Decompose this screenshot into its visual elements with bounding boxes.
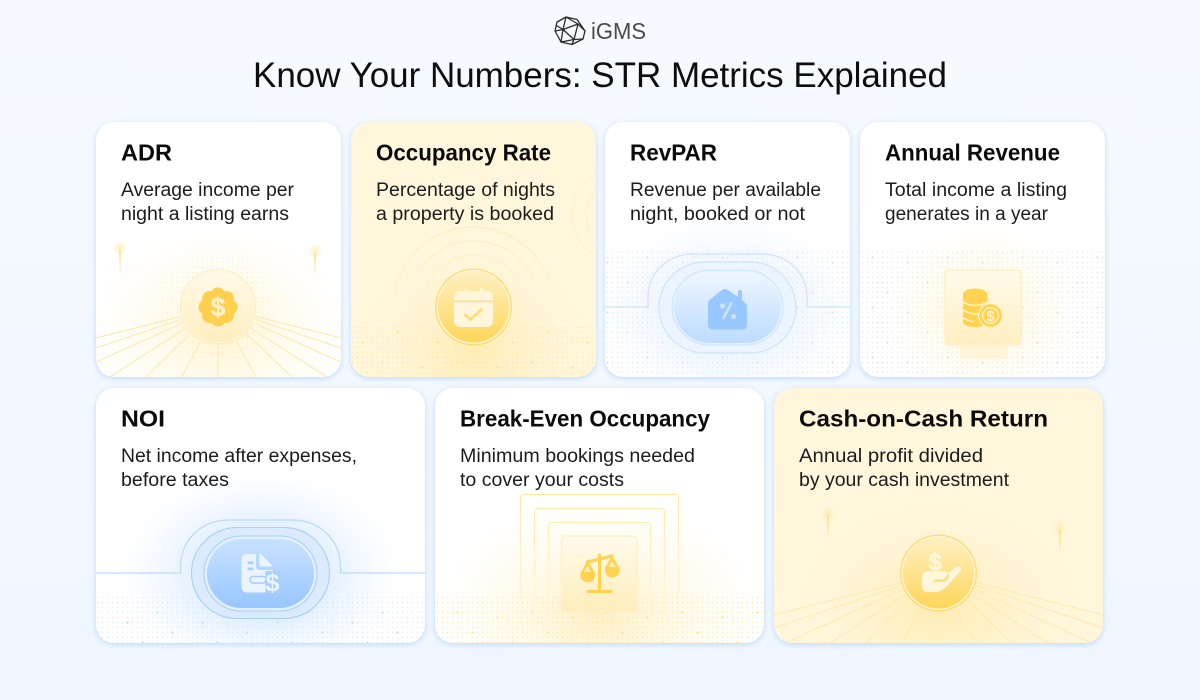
description: by your cash investment: [799, 470, 1010, 491]
glow: [846, 545, 1030, 643]
glow: [910, 247, 1056, 377]
dots: [96, 593, 425, 643]
heading: ADR: [121, 140, 172, 166]
icon: balance scale: [580, 555, 620, 592]
arch line: [96, 520, 425, 573]
icon: hand with dollar: $: [928, 549, 942, 576]
description: to cover your costs: [460, 470, 624, 491]
icon: document with dollar: $: [266, 569, 280, 597]
glow: [471, 523, 728, 643]
arch line: [605, 254, 850, 307]
logo: [555, 17, 646, 44]
panel: Break-Even Occupancy: [432, 386, 767, 648]
description: Average income per: [121, 180, 295, 201]
heading: Break-Even Occupancy: [460, 406, 710, 432]
tile: [945, 270, 1021, 345]
sparkles: [112, 240, 323, 278]
description: Net income after expenses,: [121, 446, 357, 467]
description: Total income a listing: [885, 180, 1067, 201]
dots: [860, 250, 1105, 377]
icon: dollar badge: [198, 288, 238, 326]
medallion: [436, 269, 511, 345]
heading: RevPAR: [630, 140, 717, 166]
glow: [635, 242, 820, 377]
description: Minimum bookings needed: [460, 446, 695, 467]
icon: document with dollar: [242, 554, 280, 597]
heading: Annual Revenue: [885, 140, 1060, 166]
icon: coin stack: $: [986, 308, 995, 325]
dots: [435, 593, 764, 643]
nested frames: [520, 494, 680, 610]
dots: [605, 250, 850, 377]
panel: Cash-on-Cash Return: [771, 386, 1106, 648]
heading: Cash-on-Cash Return: [799, 406, 1048, 432]
medallion: [901, 535, 976, 611]
panel: Annual Revenue: [860, 122, 1105, 402]
panel: ADR: [93, 120, 344, 382]
description: [885, 180, 1067, 225]
concentric arcs: [394, 226, 554, 299]
heading: Occupancy Rate: [376, 140, 551, 166]
tile: [562, 536, 637, 611]
description: [376, 180, 555, 225]
description: [630, 180, 821, 225]
title: Know Your Numbers: STR Metrics Explained: [253, 56, 947, 95]
outer ring: [192, 528, 330, 618]
medallion: [180, 270, 256, 344]
glow: [149, 492, 374, 643]
description: [121, 446, 357, 491]
description: before taxes: [121, 470, 229, 491]
brand name: iGMS: [591, 18, 646, 44]
icon: calendar: [454, 288, 493, 327]
description: generates in a year: [885, 204, 1049, 225]
corner arcs: [572, 173, 596, 257]
description: night, booked or not: [630, 204, 806, 225]
description: [121, 180, 295, 225]
glow: [382, 293, 574, 377]
description: Percentage of nights: [376, 180, 555, 201]
description: night a listing earns: [121, 204, 289, 225]
description: a property is booked: [376, 204, 554, 225]
heading: NOI: [121, 406, 165, 432]
panel: Occupancy Rate: [348, 120, 599, 382]
sparkles: [820, 506, 1068, 555]
description: Annual profit divided: [799, 446, 983, 467]
icon: house percent: [708, 289, 747, 330]
description: [460, 446, 695, 491]
icon: hand with dollar: [922, 549, 961, 592]
glow and dots: [122, 242, 314, 377]
outer ring: [659, 262, 796, 353]
dots: [351, 327, 596, 377]
description: [799, 446, 1010, 491]
sun rays: [96, 316, 341, 377]
panel: NOI: [96, 388, 425, 678]
card stack shadow: [960, 340, 1008, 359]
panel: RevPAR: [602, 120, 853, 382]
icon: coin stack: [963, 288, 1003, 328]
pill: [204, 536, 317, 611]
sun rays: [774, 582, 1103, 643]
description: Revenue per available: [630, 180, 821, 201]
pill: [672, 270, 783, 345]
icon: dollar badge: $: [211, 292, 226, 322]
icon: iGMS polyhedron: [555, 17, 585, 44]
